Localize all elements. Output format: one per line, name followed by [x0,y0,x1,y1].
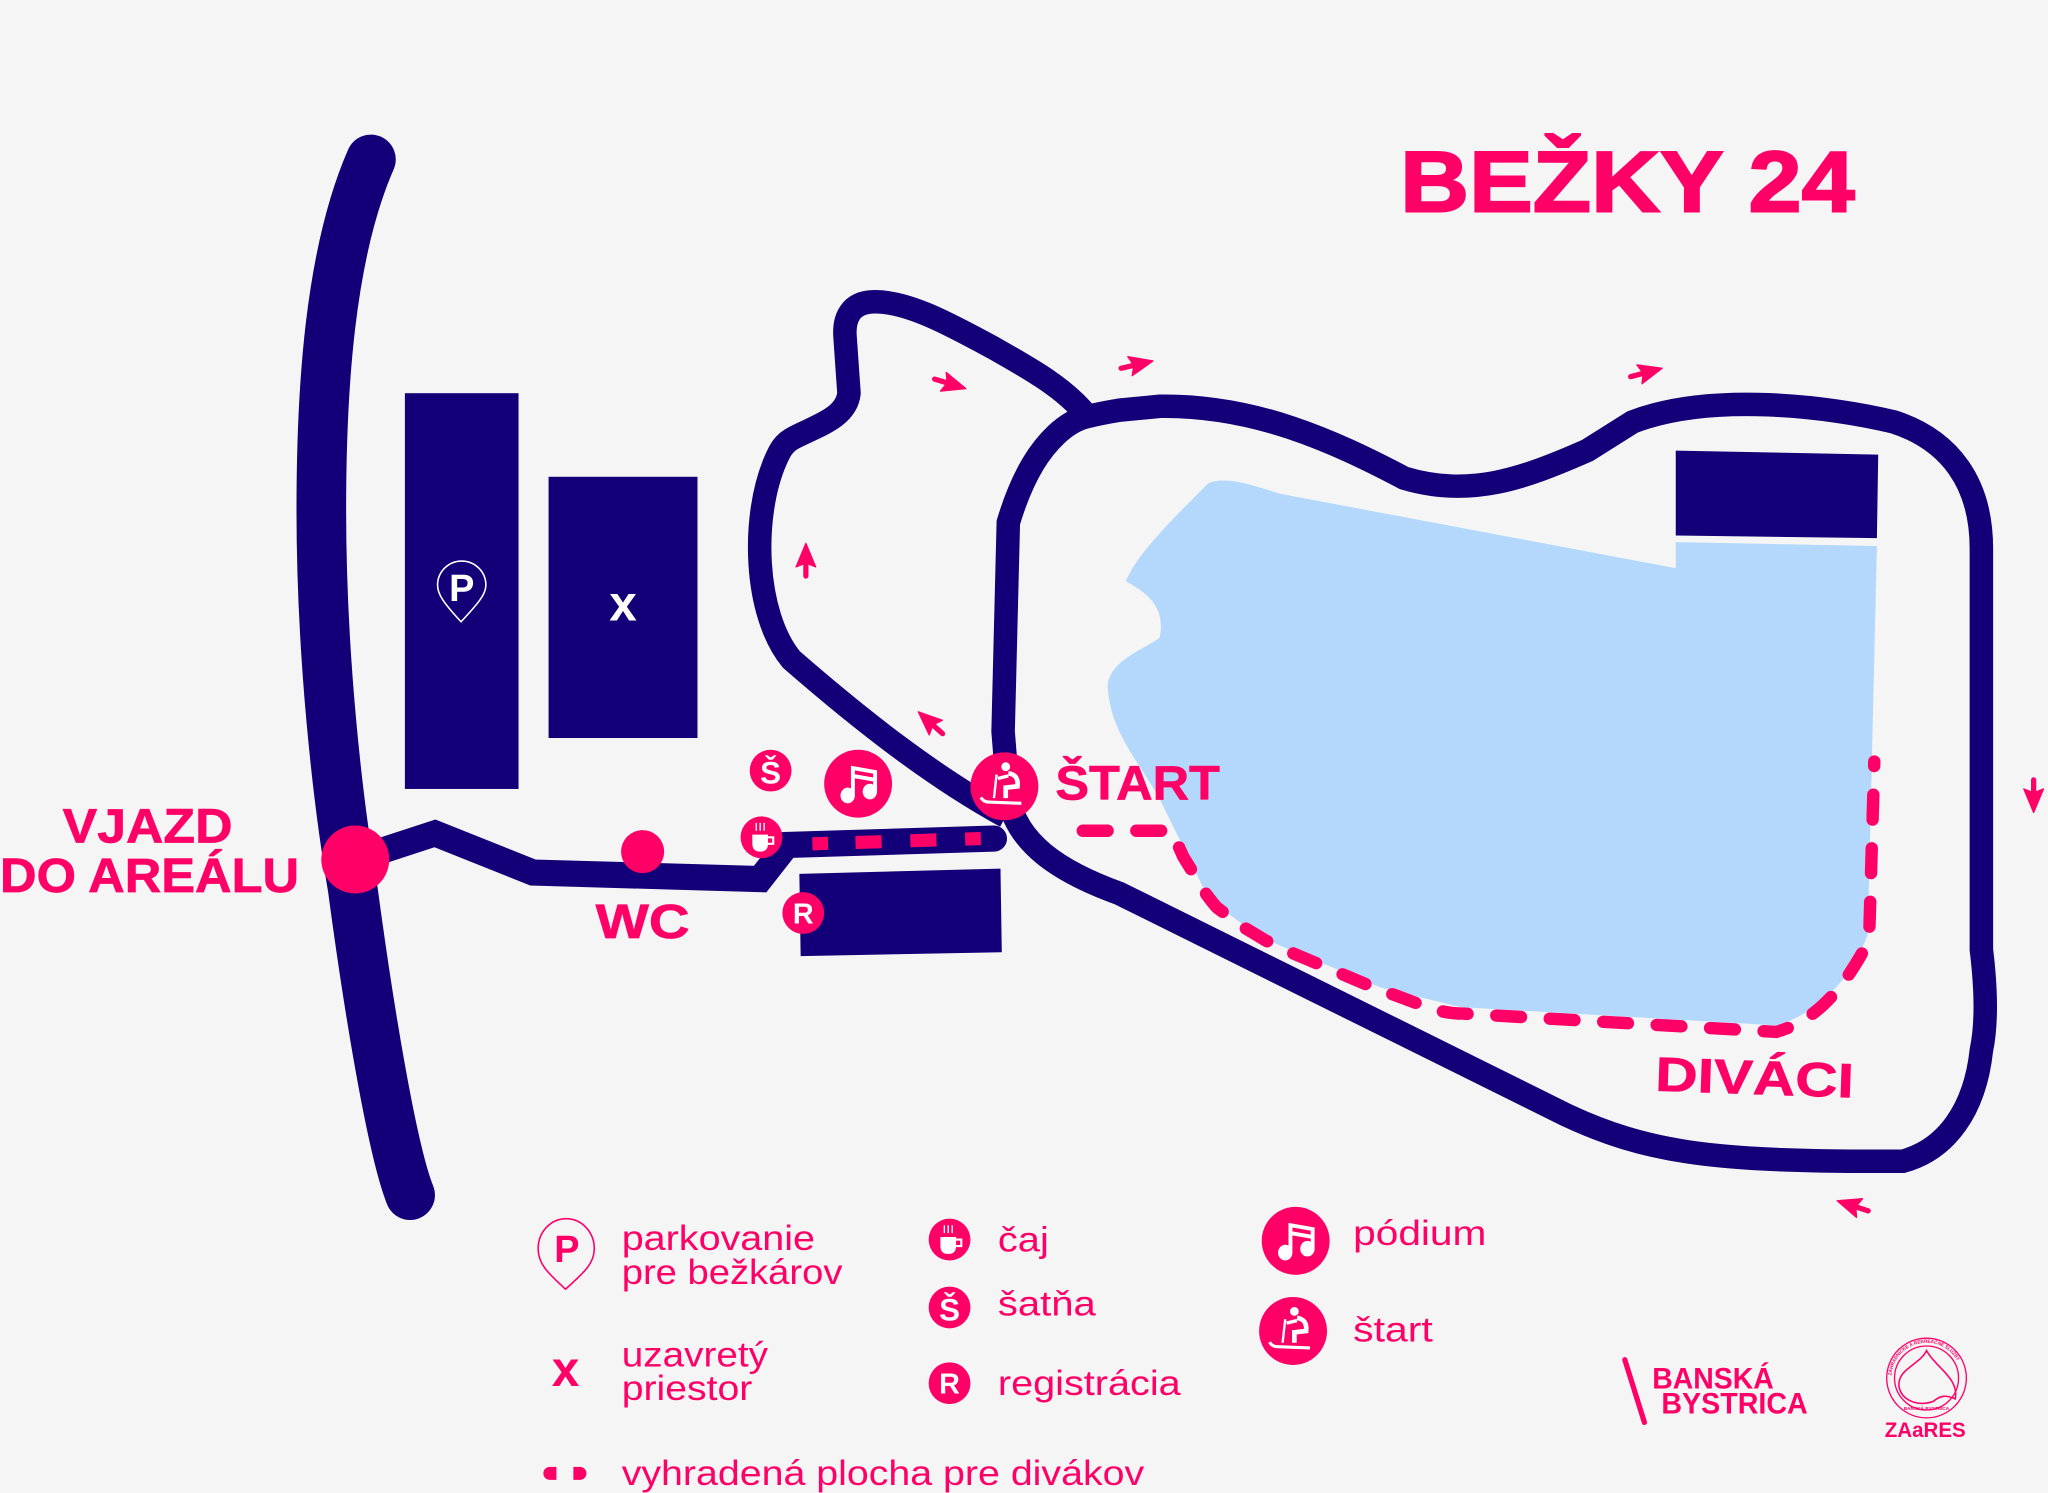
legend: parking: parkovanie [622,1219,815,1258]
label: entrance [0,800,299,903]
legend: changing room: šatňa [998,1284,1096,1323]
icon: podium on map [824,750,892,818]
icon: parking pin on map [438,561,486,622]
icon: tea on map [741,816,782,858]
legend: start [1259,1297,1433,1365]
registration building [799,869,1002,956]
legend: tea: čaj [998,1220,1049,1259]
legend: closed area: priestor [622,1369,753,1408]
icon: registration on map: R [793,898,814,930]
legend: registration: R [939,1369,960,1401]
legend: podium [1262,1207,1486,1275]
lake [1108,481,1877,1025]
icon: changing room on map [750,750,792,792]
label: entrance: VJAZD [63,799,232,853]
legend: tea [929,1219,1049,1260]
logo: Banská Bystrica: BANSKÁ [1652,1361,1774,1395]
legend: closed area [552,1335,768,1408]
entrance marker [321,826,389,893]
legend: spectator area: vyhradená plocha pre divákov [622,1454,1145,1493]
logo: ZAaRES: ZÁHRADNÍCKE A REKREAČNÉ SLUŽBY [1888,1340,1960,1376]
label: entrance: DO AREÁLU [0,849,299,903]
icon: closed area x on map: x [609,575,637,631]
label: WC: WC [596,895,690,949]
legend: changing room [929,1284,1096,1328]
legend: parking: pre bežkárov [622,1253,843,1292]
legend [538,1207,1486,1493]
logo: ZAaRES: ZAaRES [1885,1419,1966,1442]
label: start: ŠTART [1055,755,1220,810]
title: BEŽKY 24 [1400,133,1855,231]
label: spectators: DIVÁCI [1654,1048,1855,1109]
spectator area dashed line [1083,762,1874,1032]
legend: registration [929,1362,1181,1404]
legend: podium: pódium [1353,1214,1486,1253]
logo: ZAaRES: BANSKÁ BYSTRICA [1904,1405,1950,1411]
legend: changing room: Š [939,1292,960,1328]
parking area [405,393,519,789]
legend: parking: P [554,1229,579,1271]
logo: Banská Bystrica: BYSTRICA [1661,1387,1808,1420]
icon: start on map [970,752,1038,820]
legend: parking [538,1219,843,1292]
icon: changing room on map: Š [760,755,781,791]
legend: start: štart [1353,1310,1433,1349]
direction arrows [796,351,2043,1220]
access road [355,833,784,879]
main road [321,159,410,1195]
legend: closed area: uzavretý [622,1335,768,1374]
icon: registration on map [782,892,824,934]
icon: parking pin on map: P [449,568,474,610]
dark building at lake [1676,451,1878,538]
closed area [549,477,697,738]
ski track loop right [1003,404,1985,1161]
ski track loop left [760,302,1087,816]
WC marker [621,830,664,873]
legend: registration: registrácia [998,1364,1181,1403]
logo: Banská Bystrica [1625,1360,1808,1422]
building bar with dashes [784,839,994,845]
legend: closed area: x [552,1341,580,1397]
logo: ZAaRES [1885,1338,1967,1442]
